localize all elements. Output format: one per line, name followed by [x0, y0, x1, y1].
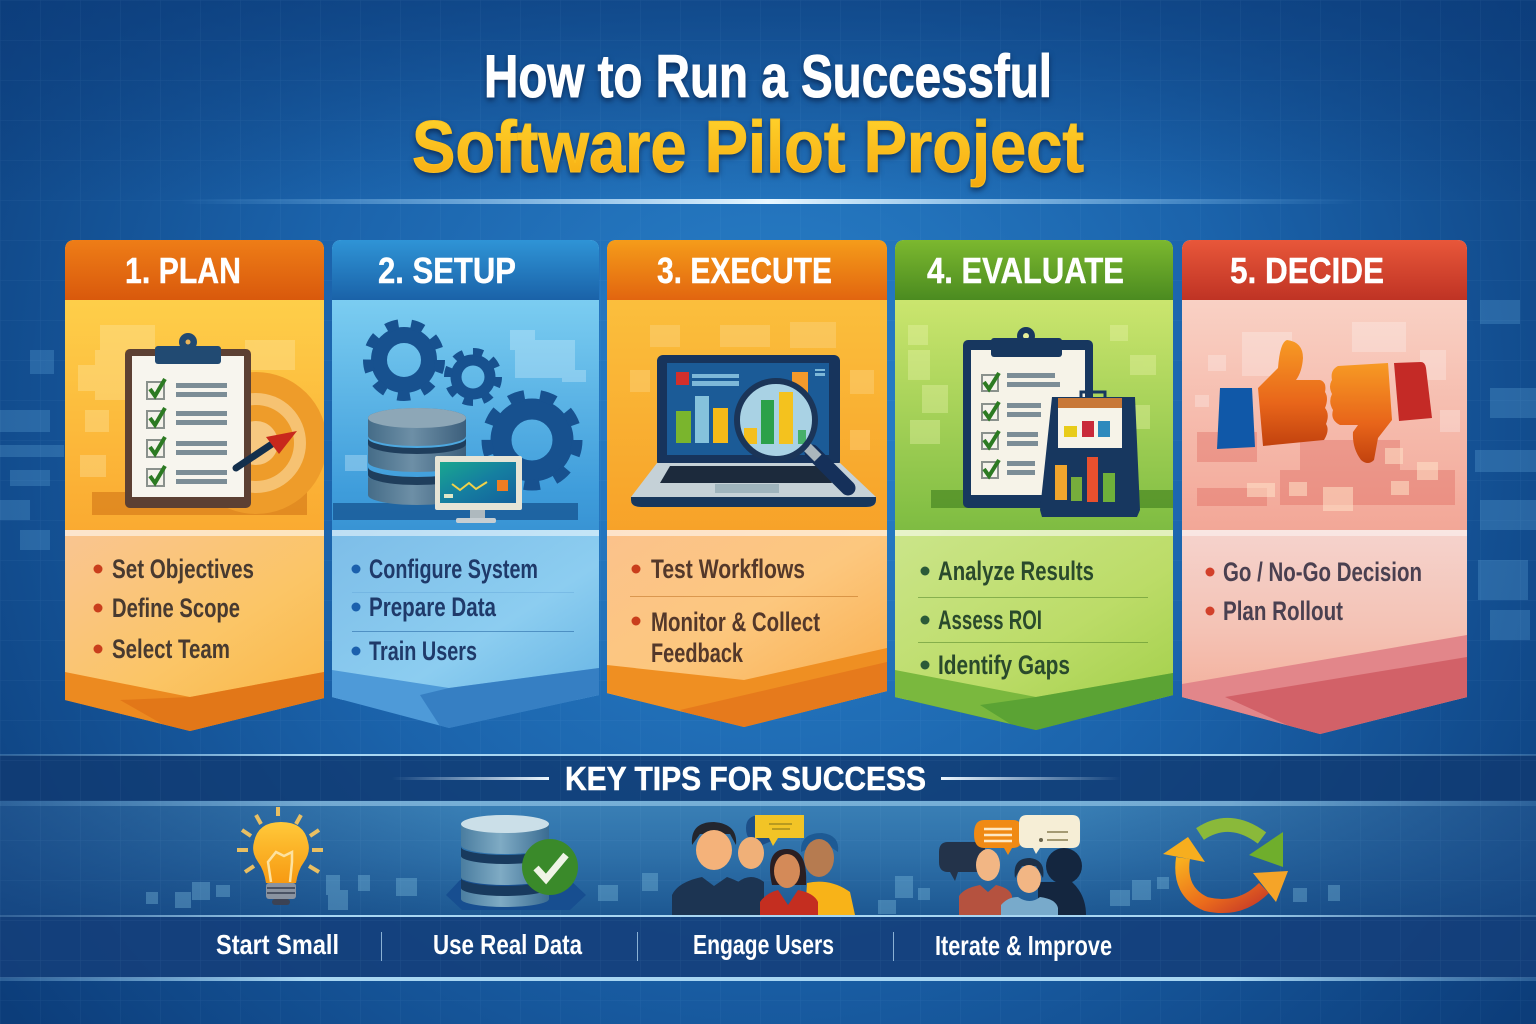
- heading: 2. SETUP: [378, 250, 516, 291]
- heading: [332, 240, 599, 300]
- tip labels: [216, 929, 1112, 961]
- heading: [607, 240, 887, 300]
- list: Monitor & Collect: [651, 607, 820, 637]
- icon: clipboard checklist: [125, 333, 251, 508]
- icon: thumbs up: [1217, 340, 1328, 449]
- list: Define Scope: [112, 593, 240, 623]
- tip: engage users: Engage Users: [693, 929, 834, 960]
- list: Assess ROI: [938, 605, 1042, 635]
- heading: 3. EXECUTE: [657, 250, 832, 291]
- panel: 1. Plan: [65, 240, 327, 740]
- list: Analyze Results: [938, 556, 1094, 586]
- title: [412, 43, 1084, 188]
- list: [332, 530, 599, 740]
- list: [1182, 530, 1467, 740]
- icon: engaged users: [672, 815, 855, 915]
- icon: clipboard: [963, 327, 1093, 508]
- icon: database: [368, 408, 466, 505]
- heading: 4. EVALUATE: [927, 250, 1124, 291]
- title line 1: How to Run a Successful: [484, 43, 1052, 110]
- list: [895, 530, 1173, 740]
- heading: [65, 240, 324, 300]
- list: Test Workflows: [651, 554, 805, 584]
- list: Train Users: [369, 636, 477, 666]
- icon: gears: [368, 324, 577, 485]
- list: [607, 530, 887, 740]
- icon: thumbs down: [1330, 362, 1432, 463]
- icon: chat group: [939, 815, 1086, 915]
- icon: cycle arrows: [1163, 825, 1288, 906]
- icon: magnifier: [737, 381, 848, 488]
- list: Go / No-Go Decision: [1223, 557, 1422, 587]
- icon: arrow: [236, 431, 297, 468]
- tip: start small: Start Small: [216, 929, 339, 960]
- heading: key tips: [392, 760, 1121, 797]
- list: Feedback: [651, 638, 744, 668]
- list: [65, 530, 324, 740]
- panel: 4. Evaluate: [895, 240, 1173, 740]
- list: Prepare Data: [369, 592, 497, 622]
- title line 2: Software Pilot Project: [412, 107, 1084, 188]
- icon: light bulb: [237, 807, 323, 905]
- heading: 5. DECIDE: [1230, 250, 1384, 291]
- tip: use real data: Use Real Data: [433, 929, 582, 960]
- heading: [1182, 240, 1467, 300]
- icon: laptop: [631, 355, 876, 507]
- panel: 3. Execute: [607, 240, 887, 740]
- tips band: [0, 754, 1536, 981]
- panel: 2. Setup: [332, 240, 599, 740]
- list: Plan Rollout: [1223, 596, 1343, 626]
- panel: 5. Decide: [1182, 240, 1467, 740]
- icon: database with check: [446, 815, 586, 910]
- icon: monitor: [435, 456, 522, 523]
- icon: target with arrow: [228, 372, 324, 514]
- icon: report chart: [1040, 392, 1140, 517]
- list: Select Team: [112, 634, 230, 664]
- list: Identify Gaps: [938, 650, 1070, 680]
- heading: [895, 240, 1173, 300]
- list: Set Objectives: [112, 554, 254, 584]
- list: Configure System: [369, 554, 538, 584]
- heading: key tips: KEY TIPS FOR SUCCESS: [565, 760, 926, 797]
- heading: 1. PLAN: [125, 250, 241, 291]
- tip: iterate and improve: Iterate & Improve: [935, 930, 1112, 961]
